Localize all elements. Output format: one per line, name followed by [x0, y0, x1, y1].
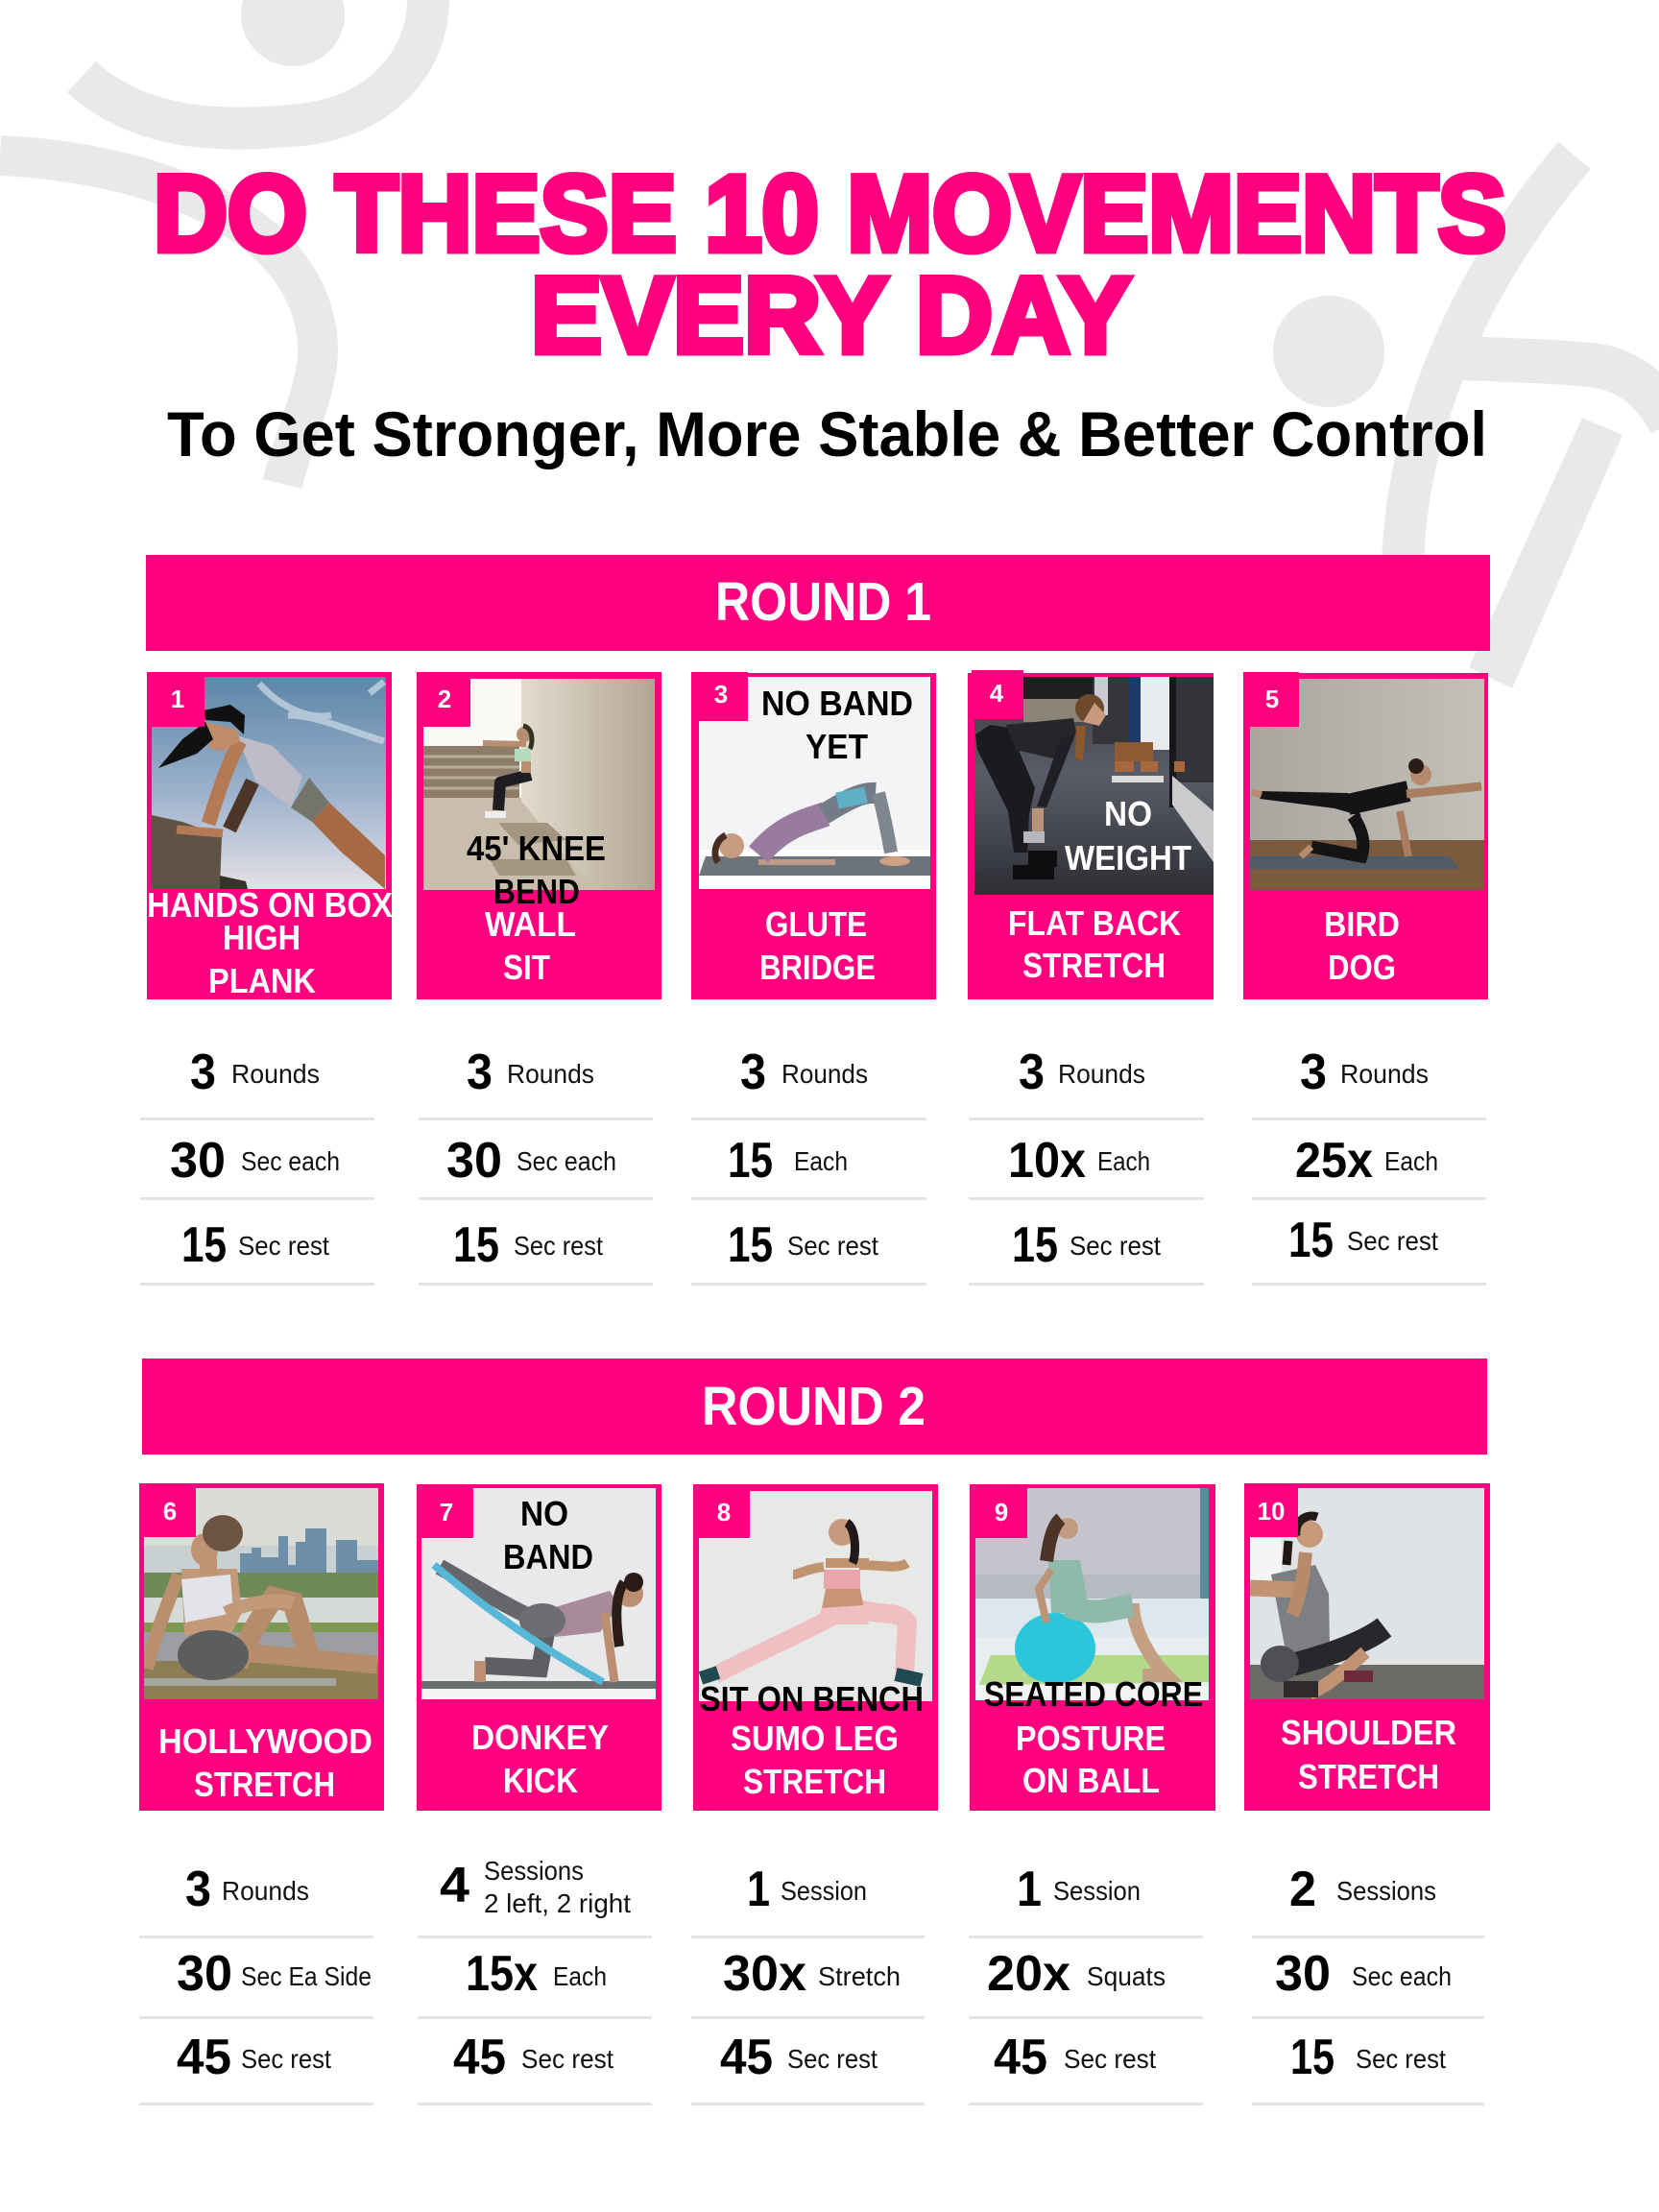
stats: exercise 1: Sec rest: [238, 1231, 329, 1261]
stats: exercise 3: [691, 1045, 926, 1286]
round 1 banner: ROUND 1: [715, 571, 931, 633]
note: 45 knee bend: [467, 829, 606, 911]
note: no band: [503, 1494, 593, 1576]
stats: exercise 9: 20x: [987, 1946, 1070, 2002]
stats: exercise 3: Sec rest: [787, 1231, 878, 1261]
stats: exercise 10: 15: [1290, 2030, 1334, 2085]
stats: exercise 6: 30: [177, 1946, 232, 2002]
stats: exercise 7: Each: [553, 1961, 607, 1991]
stats: exercise 7: 4: [440, 1858, 469, 1913]
stats: exercise 10: 30: [1275, 1946, 1331, 2002]
label: posture on ball: ON BALL: [1022, 1761, 1160, 1800]
stats: exercise 10: 2: [1289, 1862, 1316, 1917]
label: glute bridge: GLUTE: [765, 904, 867, 944]
stats: exercise 7: 2 left, 2 right: [484, 1888, 631, 1918]
stats: exercise 9: Session: [1053, 1876, 1141, 1906]
stats: exercise 10: Sec each: [1352, 1961, 1452, 1991]
photo: shoulder stretch: [1250, 1488, 1484, 1699]
badge 8: 8: [717, 1498, 731, 1527]
photo: high plank: [152, 677, 386, 889]
stats: exercise 8: 30x: [723, 1946, 806, 2002]
stats: exercise 7: Sessions: [484, 1856, 584, 1886]
stats: exercise 5: Rounds: [1340, 1059, 1429, 1089]
stats: exercise 10: Sessions: [1336, 1876, 1436, 1906]
right figure: [1273, 156, 1659, 688]
photo: posture on ball: [975, 1488, 1209, 1700]
label: hands on box high plank: [147, 885, 393, 1000]
photo: donkey kick: [421, 1488, 656, 1699]
label: posture on ball: POSTURE: [1016, 1719, 1166, 1758]
title: EVERY DAY: [531, 255, 1131, 375]
stats: exercise 4: [969, 1045, 1204, 1286]
badge 1: [147, 672, 204, 727]
stats: exercise 3: Each: [794, 1146, 848, 1176]
note: no weight: NO: [1104, 794, 1152, 833]
label: posture on ball: [1016, 1719, 1166, 1800]
note: 45 knee bend: BEND: [493, 872, 580, 911]
stats: exercise 5: Each: [1384, 1146, 1438, 1176]
badge 3: 3: [714, 680, 728, 709]
label: wall sit: WALL: [485, 904, 576, 944]
round 2 banner: [142, 1358, 1487, 1455]
stats: exercise 3: 15: [728, 1133, 773, 1189]
round 1 banner: [146, 555, 1490, 651]
note: no weight: WEIGHT: [1065, 838, 1191, 878]
stats: exercise 2: Sec each: [517, 1146, 616, 1176]
label: glute bridge: [759, 904, 876, 987]
stats: exercise 4: 10x: [1008, 1133, 1086, 1189]
exercise card 2: [417, 672, 661, 999]
photo: hollywood stretch: [144, 1488, 378, 1699]
stats: exercise 9: Squats: [1087, 1961, 1166, 1991]
note: no band: NO: [520, 1494, 568, 1533]
label: wall sit: [485, 904, 576, 987]
left figure: [0, 0, 428, 484]
stats: exercise 10: [1252, 1862, 1484, 2105]
stats: exercise 2: Sec rest: [514, 1231, 603, 1261]
badge 2: 2: [438, 685, 451, 713]
exercise card 4: [968, 670, 1214, 999]
badge 8: [693, 1484, 750, 1538]
stats: exercise 1: 30: [170, 1133, 226, 1189]
label: donkey kick: [471, 1718, 609, 1800]
label: flat back stretch: STRETCH: [1022, 946, 1166, 985]
badge 4: 4: [990, 679, 1004, 708]
stats: exercise 4: Sec rest: [1070, 1231, 1161, 1261]
note: 45 knee bend: 45' KNEE: [467, 829, 606, 868]
badge 2: [417, 672, 470, 727]
stats: exercise 9: Sec rest: [1064, 2044, 1156, 2074]
stats: exercise 3: 3: [740, 1045, 766, 1100]
photo: sumo leg stretch: [699, 1491, 932, 1701]
stats: exercise 7: 15x: [466, 1946, 538, 2002]
stats: exercise 9: 45: [994, 2030, 1047, 2085]
label: bird dog: BIRD: [1324, 904, 1400, 944]
label: bird dog: [1324, 904, 1400, 987]
stats: exercise 1: Rounds: [231, 1059, 320, 1089]
photo: glute bridge: [699, 677, 930, 889]
photo: wall sit: [423, 679, 655, 890]
label: sumo leg stretch: [731, 1719, 899, 1801]
photo: bird dog: [1250, 679, 1484, 890]
label: sumo leg stretch: STRETCH: [743, 1762, 886, 1801]
badge 6: 6: [163, 1497, 177, 1526]
stats: exercise 1: [140, 1045, 374, 1286]
label: flat back stretch: [1008, 903, 1181, 985]
badge 10: [1244, 1483, 1298, 1537]
stats: exercise 8: Stretch: [818, 1961, 901, 1991]
stats: exercise 8: Session: [781, 1876, 867, 1906]
stats: exercise 8: Sec rest: [787, 2044, 878, 2074]
stats: exercise 6: [139, 1862, 373, 2105]
note: sit on bench: SIT ON BENCH: [700, 1679, 924, 1719]
stats: exercise 4: Rounds: [1058, 1059, 1145, 1089]
stats: exercise 5: [1252, 1045, 1486, 1286]
badge 7: [417, 1484, 473, 1538]
stats: exercise 10: Sec rest: [1356, 2044, 1446, 2074]
stats: exercise 4: Each: [1097, 1146, 1150, 1176]
stats: exercise 2: Rounds: [507, 1059, 594, 1089]
stats: exercise 6: 45: [177, 2030, 231, 2085]
stats: exercise 1: 3: [190, 1045, 216, 1100]
exercise card 7: [417, 1484, 661, 1811]
stats: exercise 9: [969, 1862, 1203, 2105]
background runner figures: [0, 0, 1659, 688]
stats: exercise 4: 15: [1012, 1217, 1058, 1273]
label: wall sit: SIT: [503, 948, 550, 987]
exercise card 1: [147, 672, 393, 1000]
label: donkey kick: KICK: [503, 1761, 578, 1800]
stats: exercise 2: 30: [446, 1133, 502, 1189]
stats: exercise 6: Rounds: [222, 1876, 309, 1906]
badge 5: 5: [1265, 685, 1279, 713]
stats: exercise 7: 45: [453, 2030, 506, 2085]
label: bird dog: DOG: [1328, 948, 1396, 987]
label: shoulder stretch: SHOULDER: [1281, 1713, 1456, 1752]
stats: exercise 8: 45: [720, 2030, 773, 2085]
stats: exercise 3: Rounds: [781, 1059, 868, 1089]
exercise card 6: [139, 1483, 384, 1811]
note: no band yet: [761, 684, 913, 766]
label: hands on box high plank: HIGH: [223, 918, 301, 957]
badge 1: 1: [171, 685, 184, 713]
stats: exercise 8: 1: [747, 1862, 770, 1917]
stats: exercise 2: [419, 1045, 653, 1286]
stats: exercise 4: 3: [1019, 1045, 1045, 1100]
label: shoulder stretch: STRETCH: [1298, 1757, 1439, 1796]
stats: exercise 5: 15: [1288, 1213, 1334, 1268]
stats: exercise 6: Sec rest: [241, 2044, 331, 2074]
label: sumo leg stretch: SUMO LEG: [731, 1719, 899, 1758]
title: DO THESE 10 MOVEMENTS: [154, 154, 1506, 274]
badge 6: [139, 1483, 196, 1537]
photo: flat back stretch: [974, 677, 1214, 895]
stats: exercise 3: 15: [728, 1217, 773, 1273]
label: hollywood stretch: STRETCH: [194, 1765, 335, 1804]
label: hands on box high plank: PLANK: [208, 961, 316, 1000]
stats: exercise 6: 3: [185, 1862, 211, 1917]
round 2 banner: ROUND 2: [702, 1376, 926, 1437]
exercise card 10: [1244, 1483, 1490, 1811]
exercise card 9: [970, 1484, 1215, 1811]
exercise card 3: [691, 672, 936, 999]
label: hollywood stretch: [158, 1721, 373, 1804]
badge 4: [972, 670, 1023, 719]
stats: exercise 7: [418, 1856, 652, 2105]
badge 5: [1243, 672, 1299, 727]
stats: exercise 5: 3: [1300, 1045, 1327, 1100]
badge 9: 9: [995, 1498, 1008, 1527]
label: hollywood stretch: HOLLYWOOD: [158, 1721, 373, 1761]
badge 10: 10: [1258, 1497, 1285, 1526]
label: glute bridge: BRIDGE: [759, 948, 876, 987]
note: seated core: SEATED CORE: [984, 1674, 1203, 1714]
stats: exercise 9: 1: [1017, 1862, 1042, 1917]
stats: exercise 5: 25x: [1295, 1133, 1373, 1189]
badge 3: [691, 672, 748, 721]
stats: exercise 6: Sec Ea Side: [241, 1961, 372, 1991]
exercise card 5: [1243, 672, 1488, 999]
label: donkey kick: DONKEY: [471, 1718, 609, 1757]
note: no weight: [1065, 794, 1191, 878]
stats: exercise 5: Sec rest: [1347, 1226, 1438, 1256]
label: flat back stretch: FLAT BACK: [1008, 903, 1181, 943]
stats: exercise 8: [691, 1862, 925, 2105]
exercise card 8: [693, 1484, 938, 1811]
stats: exercise 7: Sec rest: [521, 2044, 613, 2074]
note: no band yet: YET: [805, 727, 868, 766]
title: [154, 154, 1506, 375]
stats: exercise 1: 15: [181, 1217, 227, 1273]
badge 9: [972, 1484, 1027, 1538]
label: hands on box high plank: HANDS ON BOX: [147, 885, 393, 925]
note: no band: BAND: [503, 1537, 593, 1576]
badge 7: 7: [440, 1498, 453, 1527]
label: shoulder stretch: [1281, 1713, 1456, 1796]
note: no band yet: NO BAND: [761, 684, 913, 723]
subtitle: To Get Stronger, More Stable & Better Control: [167, 398, 1487, 469]
stats: exercise 2: 15: [453, 1217, 499, 1273]
stats: exercise 2: 3: [467, 1045, 493, 1100]
stats: exercise 1: Sec each: [241, 1146, 340, 1176]
